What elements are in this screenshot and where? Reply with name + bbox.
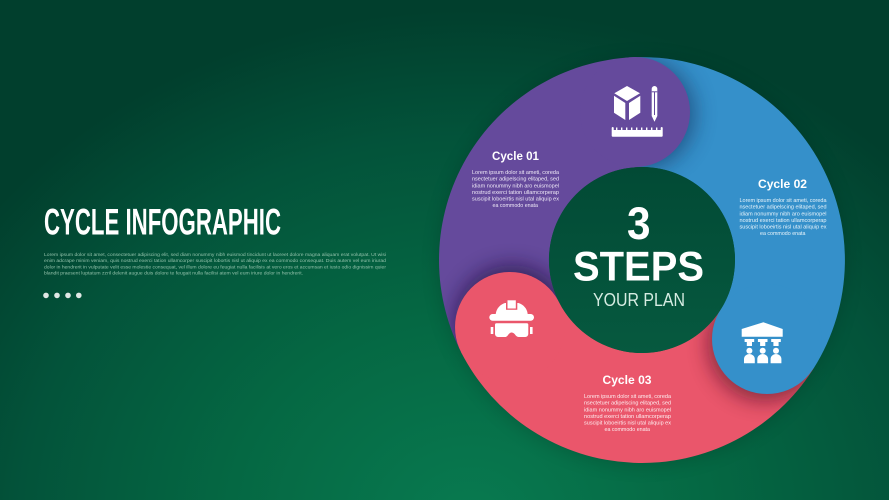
center subheading: YOUR PLAN bbox=[593, 290, 685, 310]
panel: cycle 02 blue segment bbox=[632, 57, 845, 368]
title: CYCLE INFOGRAPHIC bbox=[44, 200, 281, 242]
panel: cycle 03 red segment bbox=[461, 302, 814, 463]
intro paragraph: blandit praesent luptatum zzril delenit augue duis dolore te feugait nulla facilisi atem vel eum iriure dolor in hendrerit. bbox=[44, 270, 303, 276]
text block: cycle 02: Cycle 02 bbox=[758, 177, 807, 191]
lobe: red head bbox=[455, 272, 565, 382]
intro paragraph: dolor in hendrerit in vulputate velit esse molestie consequat, vel illum dolore eu feugiat nulla facilisis at vero eros et accumsan et iusto odio dignissim quier bbox=[44, 264, 386, 269]
text block: cycle 02: nostrud exerci tation ullamcorperap bbox=[740, 218, 826, 224]
center heading bbox=[573, 198, 704, 290]
intro paragraph: enim adcrape minim veniam, quis nostrud exerci tation ullamcorper suscipit lobortis nisl ut aliquip ex ea commodo consequat. Duis autem vel eum iriurad bbox=[44, 258, 386, 263]
text block: cycle 01: ea commodo enata bbox=[492, 203, 538, 209]
center hub bbox=[549, 167, 735, 353]
text block: cycle 02: idiam nonummy nibh aro euismopel bbox=[740, 211, 826, 217]
text block: cycle 02: ea commodo enata bbox=[760, 231, 806, 237]
center heading: 3 bbox=[627, 198, 650, 249]
text block: cycle 01: nsectetuer adipelscing elitaped, sed bbox=[472, 177, 559, 183]
text block: cycle 03 bbox=[584, 373, 671, 433]
text block: cycle 01: Cycle 01 bbox=[492, 149, 539, 163]
text block: cycle 03: suscipit loboeirtis nisl utal aliquip ex bbox=[584, 421, 671, 427]
icon: columns and people bbox=[742, 322, 783, 363]
text block: cycle 01: idiam nonummy nibh aro euismopel bbox=[472, 183, 559, 189]
text block: cycle 03: nsectetuer adipelscing elitaped, sed bbox=[584, 401, 671, 407]
text block: cycle 02: suscipit loboeirtis nisl utal aliquip ex bbox=[740, 225, 827, 231]
text block: cycle 01: Lorem ipsum dolor sit ameti, coreda bbox=[472, 170, 559, 176]
lobe: blue head bbox=[712, 284, 822, 394]
cycle ring shadow bbox=[438, 58, 846, 466]
text block: cycle 03: Lorem ipsum dolor sit ameti, coreda bbox=[584, 394, 671, 400]
text block: cycle 03: idiam nonummy nibh aro euismopel bbox=[584, 407, 671, 413]
text block: cycle 02 bbox=[740, 177, 827, 237]
icon: cube, pencil and ruler bbox=[612, 86, 663, 137]
panel: cycle 01 purple segment bbox=[439, 57, 638, 379]
intro paragraph bbox=[44, 252, 386, 276]
text block: cycle 02: nsectetuer adipelscing elitaped, sed bbox=[740, 205, 826, 211]
text block: cycle 01: nostrud exerci tation ullamcorperap bbox=[472, 190, 559, 196]
lobe: purple head bbox=[580, 57, 690, 167]
text block: cycle 02: Lorem ipsum dolor sit ameti, coreda bbox=[740, 198, 827, 204]
icon: hard hat and goggles bbox=[489, 299, 534, 337]
center heading: STEPS bbox=[573, 242, 704, 290]
text block: cycle 03: nostrud exerci tation ullamcorperap bbox=[584, 414, 671, 420]
text block: cycle 03: Cycle 03 bbox=[602, 373, 652, 387]
text block: cycle 03: ea commodo enata bbox=[604, 427, 650, 433]
text block: cycle 01 bbox=[472, 149, 559, 209]
intro paragraph: Lorem ipsum dolor sit amet, consectetuer adipiscing elit, sed diam nonummy nibh euismod tincidunt ut laoreet dolore magna aliquam erat volutpat. Ut wisi bbox=[44, 252, 386, 257]
text block: cycle 01: suscipit loboeirtis nisl utal aliquip ex bbox=[472, 197, 559, 203]
pagination dots bbox=[43, 293, 82, 298]
